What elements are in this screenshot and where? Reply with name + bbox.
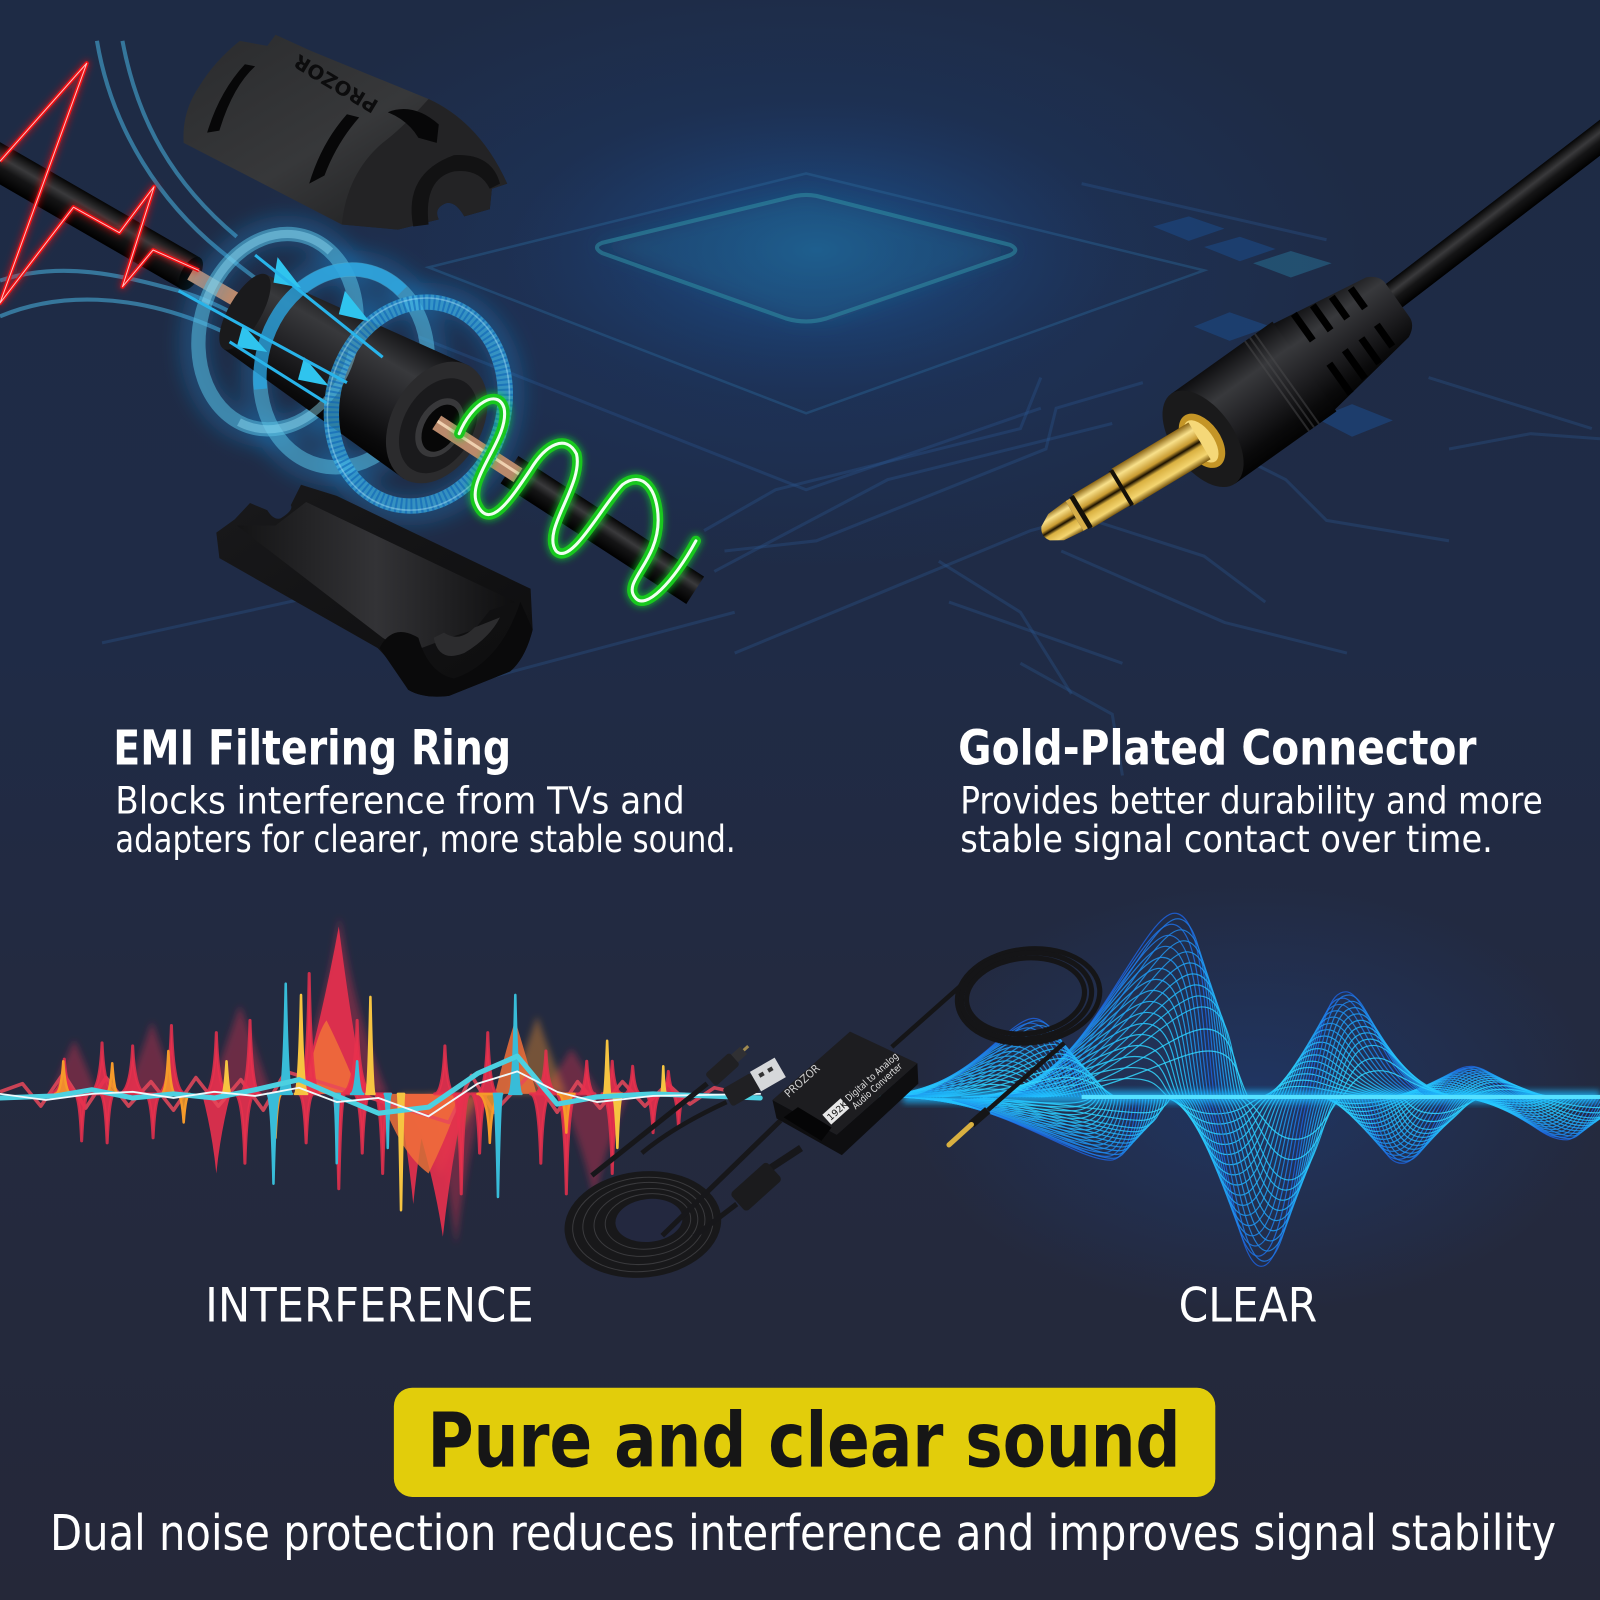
icon: EMI filter ring exploded view [0, 35, 704, 697]
small gold jack [949, 1124, 971, 1145]
heading: Gold-Plated Connector: Gold-Plated Connector [958, 720, 1477, 776]
box label chip: 192K [825, 1099, 851, 1123]
ring glow [172, 212, 533, 531]
icon: audio converter with cables [559, 942, 1105, 1285]
cable [1381, 114, 1600, 310]
waveform core [0, 1056, 760, 1116]
converter box [772, 1032, 918, 1155]
chart: clear waveform [862, 913, 1600, 1266]
label: INTERFERENCE: INTERFERENCE [205, 1278, 534, 1333]
field arrows [237, 257, 369, 386]
right cable coil and jack cable [892, 942, 1105, 1124]
text: EMI description: Blocks interference from TVs and [115, 778, 685, 822]
input cable [0, 138, 249, 317]
barrel and strain relief [1146, 255, 1429, 501]
text: EMI description: adapters for clearer, more stable sound. [115, 817, 736, 861]
icon: gold-plated 3.5mm jack [1032, 114, 1600, 553]
red spikes [49, 973, 685, 1194]
yellow spikes [222, 995, 666, 1210]
callout badge: Pure and clear sound: Pure and clear sound [428, 1396, 1181, 1484]
first and second coils behind the core [177, 216, 450, 486]
ferrite core cylinder [198, 247, 508, 501]
cyan spikes [267, 984, 521, 1197]
output cable and copper wire [428, 409, 704, 604]
box product name: Digital to Analog [844, 1051, 901, 1104]
orange spikes [55, 1051, 574, 1143]
gold plug [1032, 423, 1211, 553]
flowing blue field lines [0, 41, 383, 403]
field lines over core [179, 255, 383, 403]
callout badge: Pure and clear sound [394, 1388, 1215, 1497]
bottom shell half [216, 485, 533, 697]
brand embossed on shell: PROZOR [290, 49, 382, 117]
green clean signal wave [459, 399, 696, 601]
box product name: Audio Converter [850, 1061, 905, 1112]
red interference zigzag [0, 63, 199, 303]
heading: EMI Filtering Ring: EMI Filtering Ring [113, 720, 511, 776]
ferrite bead [730, 1161, 783, 1212]
third coil in front [177, 216, 533, 531]
text: connector description: stable signal contact over time. [960, 817, 1493, 861]
chart: interference waveform [0, 916, 760, 1245]
circuit board backdrop [102, 0, 1600, 1311]
label: CLEAR: CLEAR [1179, 1278, 1317, 1333]
left cables [592, 1084, 801, 1237]
central noise band [0, 1071, 760, 1122]
waveform halo [51, 916, 629, 1245]
broad red and orange masses [202, 927, 465, 1237]
left cable coil [559, 1164, 727, 1285]
optical connector [705, 1040, 754, 1086]
box brand: PROZOR [782, 1062, 823, 1100]
top shell half [183, 35, 507, 230]
USB plug [722, 1058, 786, 1108]
